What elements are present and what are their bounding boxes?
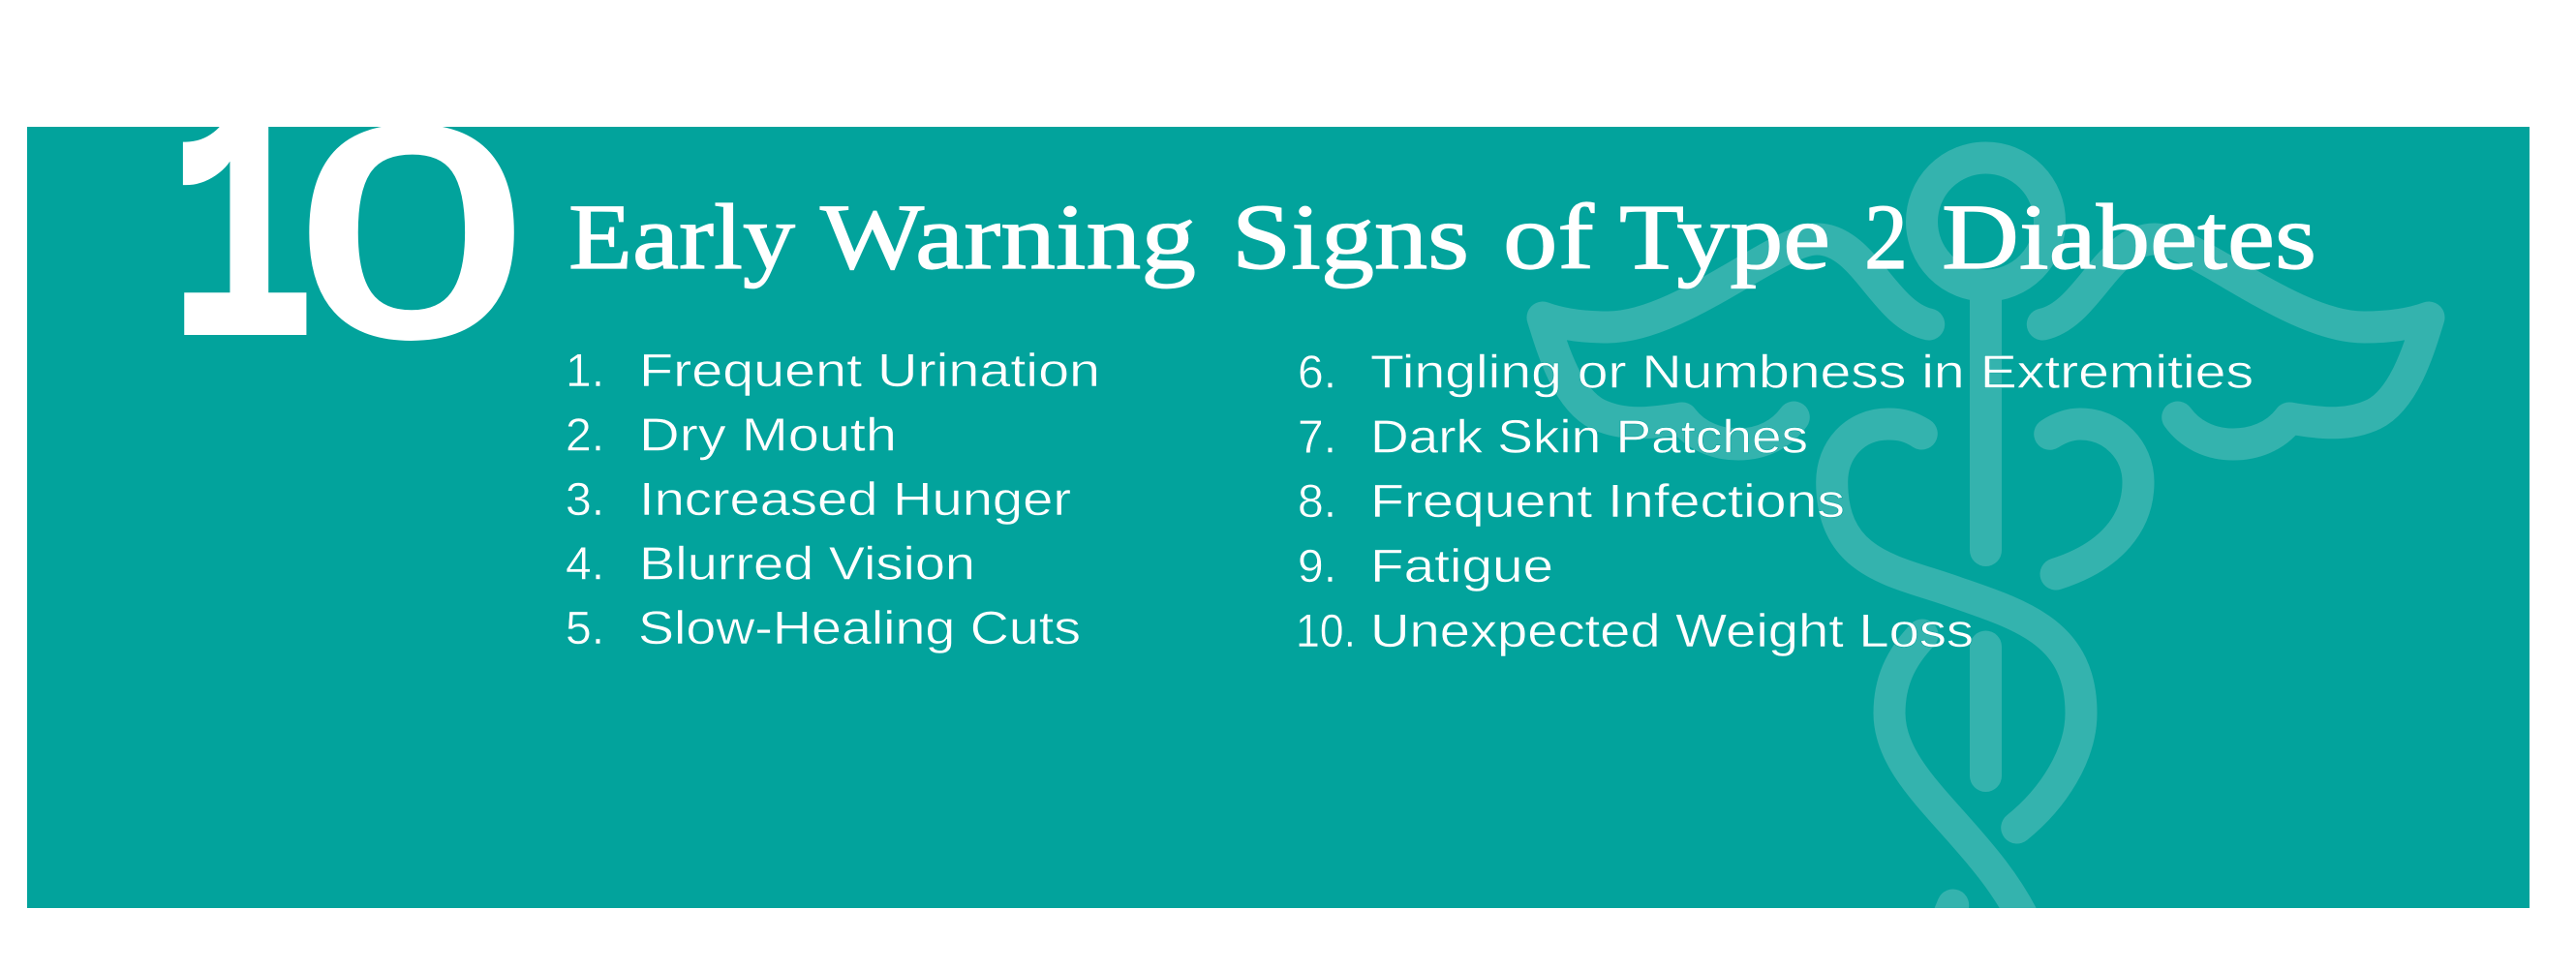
panel: teal background (27, 127, 2530, 908)
left wing (1543, 239, 1929, 444)
digit 1: 1 (169, 49, 314, 434)
item 4: Blurred Vision (639, 538, 975, 591)
big number 10 (169, 49, 523, 434)
word: of: of (1503, 185, 1594, 288)
word: Type: Type (1619, 185, 1830, 288)
staff lower (1970, 647, 2002, 776)
snake lower body (1889, 635, 2029, 929)
word: 2: 2 (1864, 185, 1908, 288)
item 2: 2. (566, 410, 604, 461)
staff ring (1921, 158, 2049, 286)
item 10: Unexpected Weight Loss (1370, 606, 1974, 657)
item 7: Dark Skin Patches (1370, 412, 1808, 463)
word: Signs: Signs (1232, 185, 1469, 288)
item 9: 9. (1298, 541, 1336, 592)
right wing (2042, 239, 2429, 444)
digit 0: 0 (300, 69, 523, 395)
snake main body (1832, 424, 2081, 828)
item 5: Slow-Healing Cuts (638, 603, 1081, 654)
item 6: 6. (1298, 348, 1336, 399)
item 4: 4. (566, 538, 604, 591)
item 5: 5. (566, 603, 604, 654)
title (568, 185, 2316, 288)
item 6: Tingling or Numbness in Extremities (1370, 348, 2254, 399)
snake right arc (2050, 424, 2138, 574)
list: signs 1 to 5 (566, 346, 1100, 654)
word: Early: Early (568, 185, 795, 288)
item 8: 8. (1298, 476, 1336, 528)
word: Diabetes: Diabetes (1942, 185, 2316, 288)
item 1: Frequent Urination (639, 346, 1100, 397)
item 9 (1298, 541, 1553, 592)
icon: caduceus watermark (1543, 158, 2429, 944)
snake tail end (1937, 905, 1953, 944)
item 2 (566, 410, 897, 461)
item 7: 7. (1298, 412, 1336, 463)
item 1: 1. (566, 346, 604, 397)
item 3: Increased Hunger (639, 474, 1071, 526)
item 3: 3. (566, 474, 604, 526)
item 10: 10. (1296, 606, 1356, 657)
item 2: Dry Mouth (639, 410, 897, 461)
item 9: Fatigue (1370, 541, 1553, 592)
item 8: Frequent Infections (1370, 476, 1845, 528)
staff upper (1970, 286, 2002, 550)
word: Warning: Warning (820, 185, 1196, 288)
list: signs 6 to 10 (1296, 348, 2254, 657)
